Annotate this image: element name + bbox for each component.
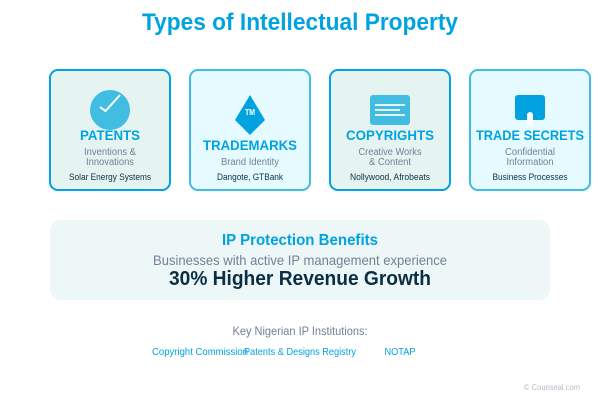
heading: trademarks: TRADEMARKS [203, 137, 297, 153]
text: trademarks example: Dangote, GTBank [217, 172, 283, 182]
heading: trade secrets: TRADE SECRETS [476, 127, 584, 143]
text: patents description: Inventions & [84, 147, 136, 158]
text: copyrights example: Nollywood, Afrobeats [350, 172, 430, 182]
icon: lock [515, 95, 545, 126]
heading: benefits: IP Protection Benefits [222, 232, 378, 249]
title: Types of Intellectual Property [142, 9, 459, 36]
text: trade secrets description: Confidential [505, 147, 555, 158]
statistic: revenue growth: 30% Higher Revenue Growth [169, 268, 431, 290]
panel: IP protection benefits [50, 220, 550, 300]
icon: check circle [90, 90, 130, 130]
text: copyrights description [358, 147, 422, 168]
text: trade secrets description [505, 147, 555, 168]
panel: patents [50, 70, 170, 190]
footer: credit: © Counseal.com [524, 383, 580, 392]
icon: document [370, 95, 410, 125]
text: patents example: Solar Energy Systems [69, 172, 151, 182]
text: patents description [84, 147, 136, 168]
heading: copyrights: COPYRIGHTS [346, 127, 434, 143]
text: NOTAP: NOTAP [384, 347, 416, 358]
text: trademarks description: Brand Identity [221, 157, 279, 168]
panel: copyrights [330, 70, 450, 190]
text: copyright commission: Copyright Commission [152, 347, 248, 358]
text: patents description: Innovations [86, 157, 134, 168]
text: trade secrets description: Information [506, 157, 554, 168]
icon: trademark diamond: TM [245, 108, 255, 117]
text: patents and designs registry: Patents & Designs Registry [244, 347, 356, 358]
text: copyrights description: Creative Works [358, 147, 422, 158]
text: copyrights description: & Content [369, 157, 411, 168]
text: trade secrets example: Business Processes [492, 172, 568, 182]
text: benefits description: Businesses with active IP management experience [153, 252, 447, 268]
heading: institutions: Key Nigerian IP Institutions: [232, 324, 368, 338]
panel: trademarks [190, 70, 310, 190]
heading: patents: PATENTS [80, 127, 140, 143]
panel: trade secrets [470, 70, 590, 190]
